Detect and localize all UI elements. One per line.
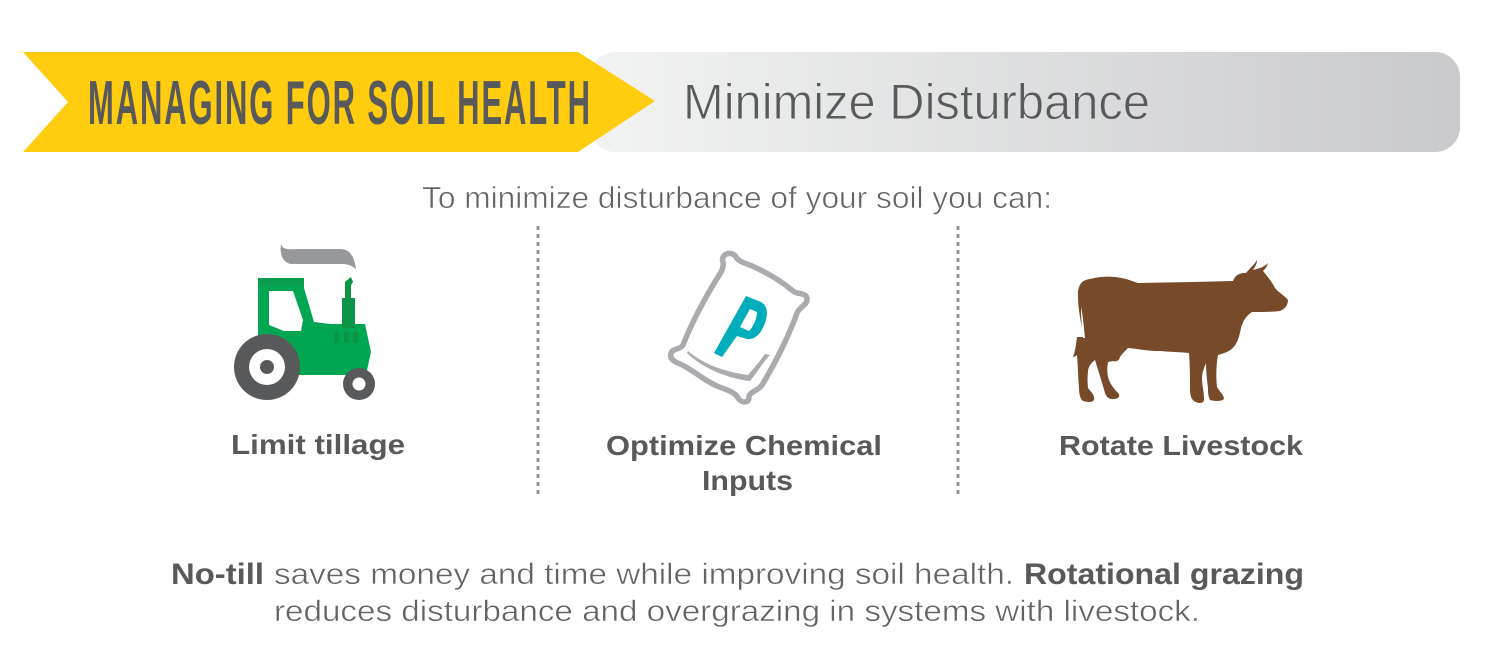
intro text: To minimize disturbance of your soil you can: (422, 180, 1052, 215)
bag outline (671, 253, 807, 402)
title: MANAGING FOR SOIL HEALTH (88, 70, 590, 138)
closing text: Rotational grazing (1024, 558, 1304, 591)
icon: fertilizer bag (671, 253, 807, 402)
bag fold (687, 351, 770, 381)
letter P (714, 296, 767, 357)
label: optimize chemical inputs: Optimize Chemical (606, 430, 882, 461)
label: rotate livestock: Rotate Livestock (1059, 430, 1303, 461)
yellow arrow banner (23, 52, 655, 152)
tractor body (258, 278, 371, 375)
icon: cow (1073, 260, 1288, 403)
large wheel (234, 334, 300, 400)
closing text (171, 558, 1304, 628)
tractor smoke (281, 244, 356, 269)
subtitle band (590, 52, 1460, 152)
subtitle: Minimize Disturbance (683, 74, 1150, 130)
icon: tractor (234, 244, 375, 400)
label: optimize chemical inputs: Inputs (702, 465, 793, 496)
label: limit tillage: Limit tillage (231, 429, 405, 460)
closing text: reduces disturbance and overgrazing in systems with livestock. (274, 595, 1200, 628)
closing text: No-till (171, 558, 264, 591)
closing text: saves money and time while improving soil health. (274, 558, 1014, 591)
label: optimize chemical inputs (606, 430, 882, 496)
exhaust stack (342, 277, 355, 328)
small wheel (343, 368, 375, 400)
header banner (23, 52, 1460, 152)
vents (334, 332, 358, 343)
